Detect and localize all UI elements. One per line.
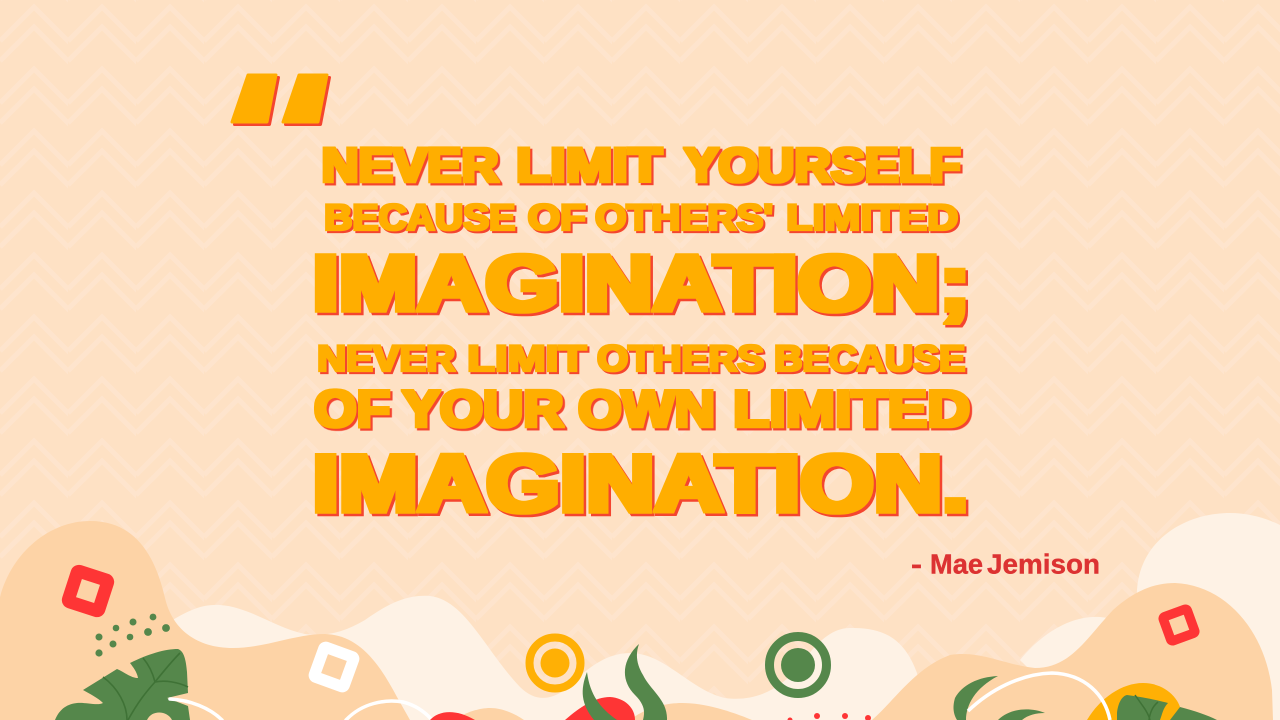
attribution [911,548,1100,579]
quote text: NEVER [317,337,455,379]
quote text: BECAUSE [324,196,515,238]
quote text: YOUR [402,380,564,438]
leaves [1117,695,1168,720]
quote text: OF [528,196,586,238]
white arc [968,673,1110,720]
quotation mark [232,75,327,122]
quote text: LIMITED [786,196,958,238]
quote text: NEVER [322,140,498,192]
right foliage [954,673,1217,720]
quote text: IMAGINATION; [312,238,970,328]
quote text: BECAUSE [774,337,965,379]
icon: orange ring [530,638,580,688]
red shapes [430,697,635,720]
quote text: OF [314,380,390,438]
icon: red square left [68,571,108,611]
icon: green ring [770,636,826,694]
quote text: IMAGINATION. [312,438,968,530]
icon: monstera leaf [55,649,190,720]
attribution: Mae [930,548,983,579]
quote text: LIMIT [516,140,662,192]
seaweed [583,644,667,720]
quote text: OTHERS' [595,196,773,238]
orange blob [1087,683,1180,720]
quote text: OWN [578,380,715,438]
attribution: - [911,548,922,579]
back cream waves [165,513,1280,720]
attribution: Jemison [987,548,1100,579]
quote text: OTHERS [597,337,764,379]
peach hills [0,521,1273,720]
white curves [170,699,432,720]
icon: white square [314,647,354,687]
dots [95,614,170,657]
icon: red square right [1163,609,1195,641]
quote text: LIMITED [733,380,970,438]
quote text: YOURSELF [684,140,960,192]
quote text [312,140,970,530]
red dots [788,713,871,720]
quote text: LIMIT [467,337,587,379]
